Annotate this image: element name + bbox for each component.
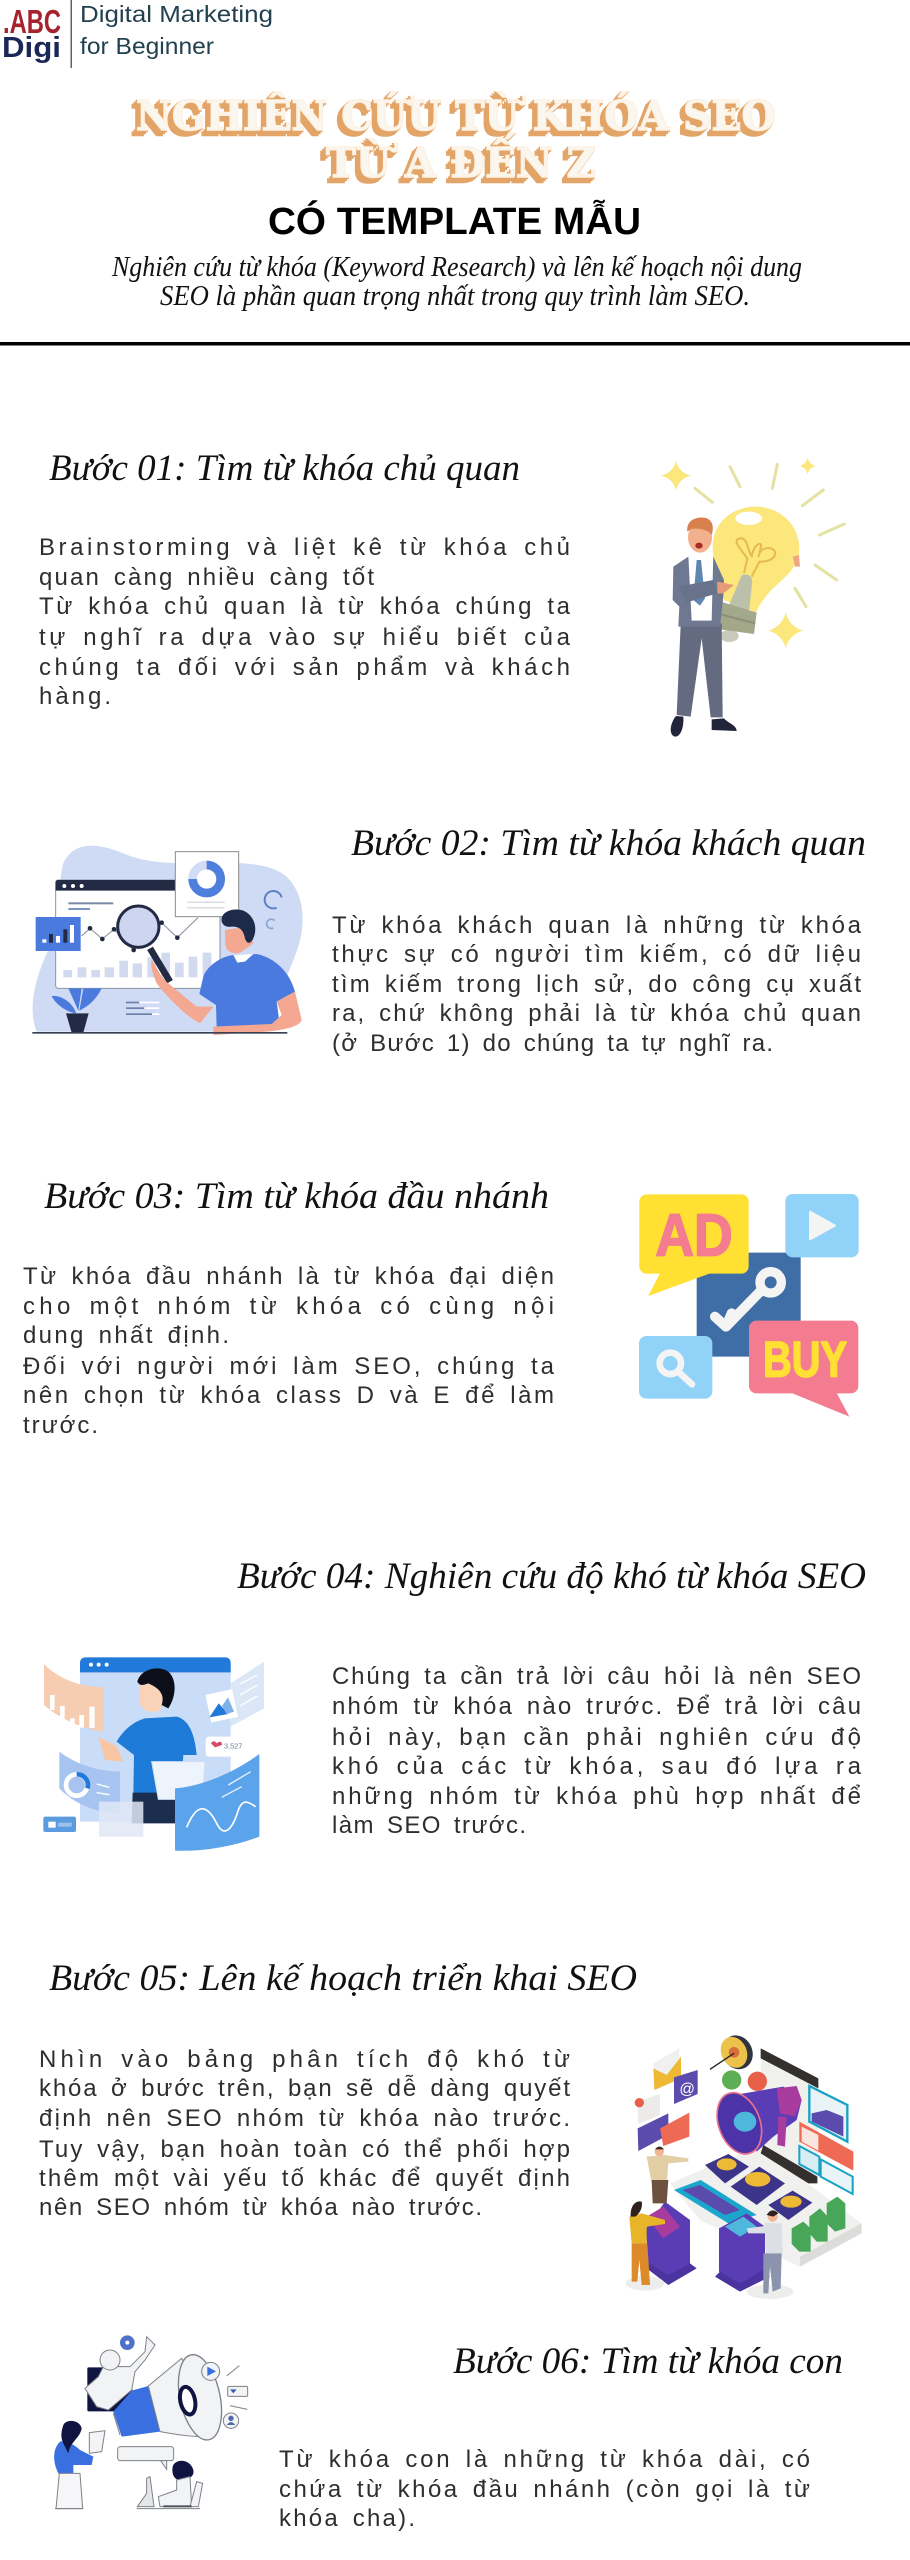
text block: step 5: thêm một vài yếu tố khác để quyết định: [39, 2165, 570, 2192]
title line 1: NGHIÊN CỨU TỪ KHÓA SEO: [135, 92, 775, 141]
logo mark: ABC Digi: Digi: [2, 32, 61, 64]
heading: step 1: Bước 01: Tìm từ khóa chủ quan: [49, 448, 520, 489]
text block: step 2: (ở Bước 1) do chúng ta tự nghĩ ra.: [332, 1030, 773, 1057]
text block: step 5: [39, 2046, 570, 2221]
text block: step 5: khóa ở bước trên, bạn sẽ dễ dàng quyết: [39, 2075, 570, 2102]
heading: step 4: Bước 04: Nghiên cứu độ khó từ khóa SEO: [237, 1556, 866, 1597]
text block: step 6: Từ khóa con là những từ khóa dài, có: [279, 2446, 810, 2473]
text block: step 1: tự nghĩ ra dựa vào sự hiểu biết của: [39, 624, 571, 651]
heading: step 3: Bước 03: Tìm từ khóa đầu nhánh: [44, 1176, 549, 1217]
icon: ad, key and buy bubbles: AD: [655, 1201, 733, 1268]
text block: step 4: làm SEO trước.: [332, 1812, 526, 1839]
text block: step 4: [332, 1663, 862, 1839]
intro text: SEO là phần quan trọng nhất trong quy trình làm SEO.: [160, 281, 750, 312]
text block: step 2: ra, chứ không phải là từ khóa chủ quan: [332, 1000, 861, 1027]
logo mark: ABC Digi: .ABC: [3, 3, 61, 40]
intro text: Nghiên cứu từ khóa (Keyword Research) và lên kế hoạch nội dung: [111, 252, 802, 283]
text block: step 2: tìm kiếm trong lịch sử, do công cụ xuất: [332, 971, 861, 998]
icon: man with light bulb: [661, 458, 844, 737]
title line 1: NGHIÊN CỨU TỪ KHÓA SEO: [131, 96, 771, 145]
text block: step 5: Tuy vậy, bạn hoàn toàn có thể phối hợp: [39, 2136, 570, 2163]
text block: step 4: Chúng ta cần trả lời câu hỏi là nên SEO: [332, 1663, 861, 1690]
panel: step 3: [23, 1176, 859, 1439]
text block: step 1: hàng.: [39, 683, 111, 710]
title line 1: NGHIÊN CỨU TỪ KHÓA SEO: [133, 94, 773, 143]
text block: step 2: thực sự có người tìm kiếm, có dữ liệu: [332, 941, 861, 968]
text block: step 4: khó của các từ khóa, sau đó lựa ra: [332, 1753, 862, 1780]
title line 2: TỪ A ĐẾN Z: [325, 134, 595, 188]
logo tagline: [80, 1, 273, 59]
heading: step 6: Bước 06: Tìm từ khóa con: [453, 2341, 843, 2382]
text block: step 1: quan càng nhiều càng tốt: [39, 564, 374, 591]
text block: step 3: dung nhất định.: [23, 1322, 229, 1349]
heading: step 5: Bước 05: Lên kế hoạch triển khai SEO: [49, 1958, 637, 1999]
title line 2: TỪ A ĐẾN Z: [321, 138, 591, 192]
text block: step 4: hỏi này, bạn cần phải nghiên cứu độ: [332, 1724, 861, 1751]
icon: person with data screens: [43, 1657, 264, 1851]
icon: ad, key and buy bubbles: BUY: [763, 1332, 847, 1388]
text block: step 2: [332, 912, 862, 1057]
text block: step 1: Từ khóa chủ quan là từ khóa chúng ta: [39, 593, 571, 620]
title line 2: TỪ A ĐẾN Z: [326, 133, 596, 187]
text block: step 1: Brainstorming và liệt kê từ khóa chủ: [39, 534, 570, 561]
text block: step 3: cho một nhóm từ khóa có cùng nội: [23, 1293, 554, 1320]
icon: analyst with magnifier: [32, 846, 303, 1035]
panel: step 4: [43, 1556, 866, 1851]
header logo: [2, 0, 273, 68]
text block: step 6: [279, 2446, 810, 2532]
text block: step 3: Đối với người mới làm SEO, chúng ta: [23, 1353, 555, 1380]
title line 1: NGHIÊN CỨU TỪ KHÓA SEO: [136, 91, 776, 140]
text block: step 1: [39, 534, 571, 710]
subtitle: có template mẫu: CÓ TEMPLATE MẪU: [268, 199, 641, 243]
panel: step 6: [54, 2335, 843, 2532]
text block: step 4: nhóm từ khóa nào trước. Để trả lời câu: [332, 1693, 861, 1720]
panel: step 1: [39, 448, 844, 737]
intro text: [111, 252, 802, 312]
title line 2: TỪ A ĐẾN Z: [323, 136, 593, 190]
text block: step 6: khóa cha).: [279, 2505, 415, 2532]
title block: [111, 91, 802, 312]
text block: step 4: những nhóm từ khóa phù hợp nhất để: [332, 1783, 861, 1810]
text block: step 2: Từ khóa khách quan là những từ khóa: [332, 912, 862, 939]
panel: step 2: [32, 823, 866, 1057]
text block: step 6: chứa từ khóa đầu nhánh (còn gọi là từ: [279, 2476, 810, 2503]
text block: step 5: định nên SEO nhóm từ khóa nào trước.: [39, 2105, 570, 2132]
icon: person with data screens: 3,527: [224, 1742, 242, 1751]
icon: megaphone with people: [54, 2335, 248, 2509]
logo divider: [70, 0, 72, 68]
text block: step 3: [23, 1263, 555, 1439]
logo mark: ABC Digi: [2, 3, 61, 64]
text block: step 3: trước.: [23, 1412, 98, 1439]
heading: step 2: Bước 02: Tìm từ khóa khách quan: [351, 823, 866, 864]
icon: ad, key and buy bubbles: [639, 1194, 859, 1417]
logo tagline: Digital Marketing: [80, 1, 273, 27]
text block: step 5: nên SEO nhóm từ khóa nào trước.: [39, 2194, 482, 2221]
logo tagline: for Beginner: [80, 33, 214, 59]
text block: step 3: nên chọn từ khóa class D và E để làm: [23, 1382, 554, 1409]
panel: step 5: [39, 1958, 862, 2299]
icon: isometric marketing scene: [626, 2030, 862, 2299]
icon: isometric marketing scene: @: [679, 2081, 695, 2098]
text block: step 1: chúng ta đối với sản phẩm và khách: [39, 654, 570, 681]
text block: step 3: Từ khóa đầu nhánh là từ khóa đại diện: [23, 1263, 554, 1290]
text block: step 5: Nhìn vào bảng phân tích độ khó từ: [39, 2046, 570, 2073]
